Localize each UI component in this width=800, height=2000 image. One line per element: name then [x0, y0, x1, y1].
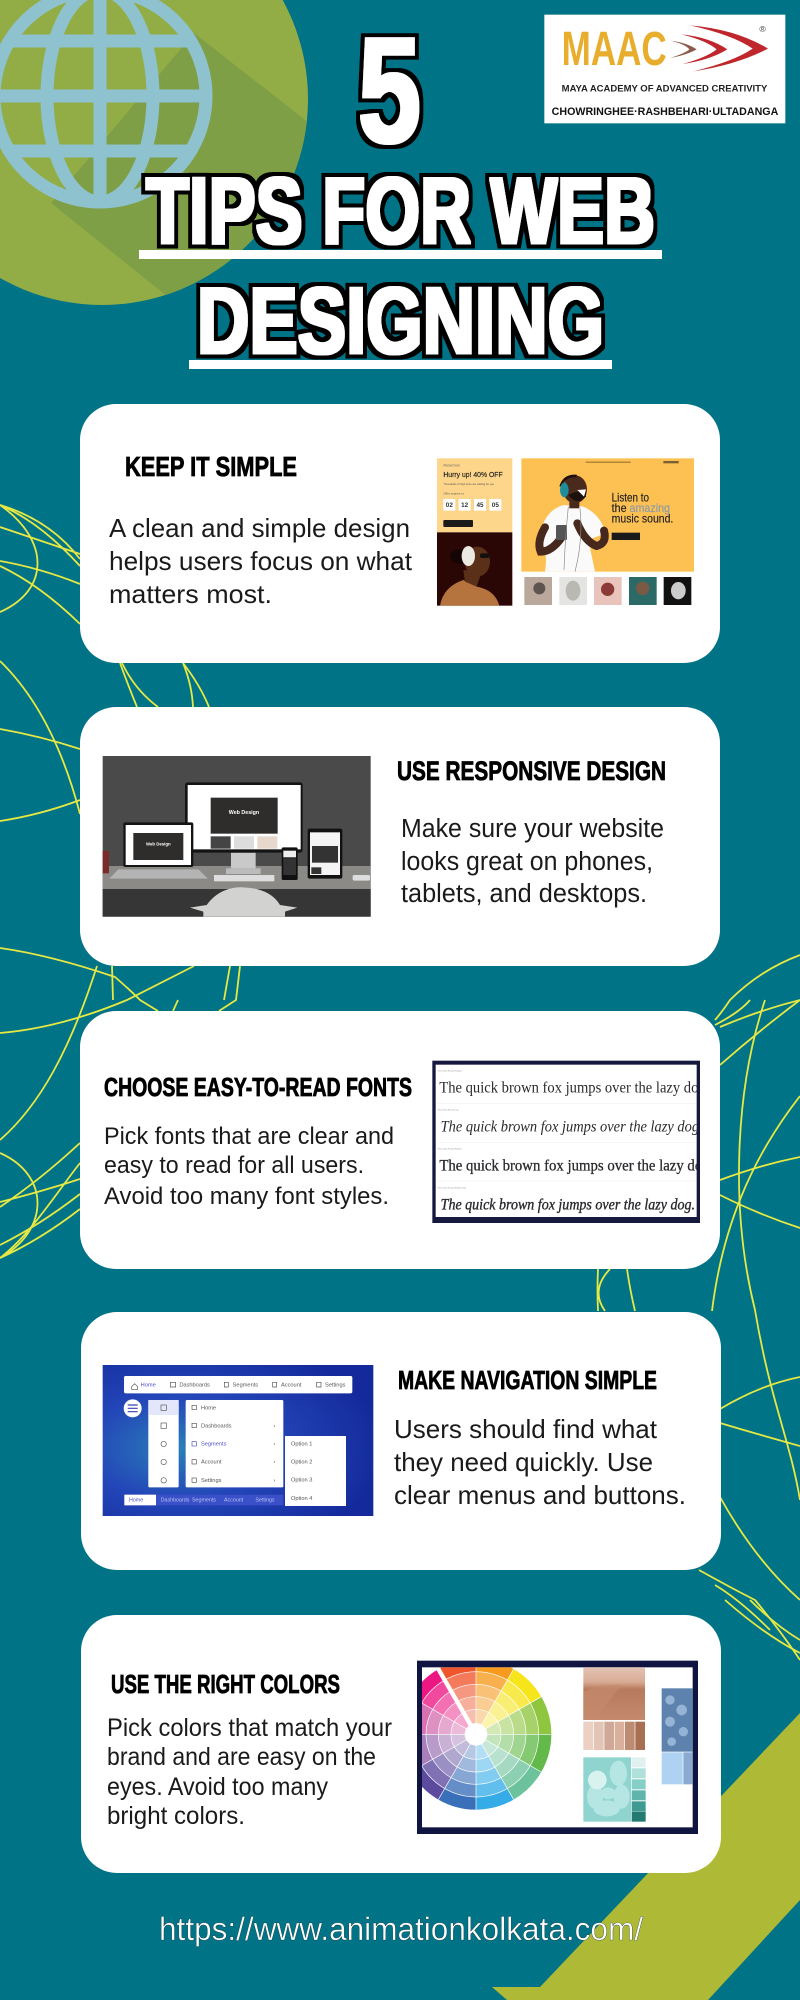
icon: globe [0, 0, 206, 202]
olive arrow shape [492, 1713, 800, 2000]
title [139, 6, 662, 373]
dropdown menu: › [273, 1423, 275, 1429]
hamburger [124, 1399, 142, 1417]
bottom bar [124, 1495, 283, 1505]
body text [107, 1714, 392, 1830]
panel: choose easy-to-read fonts [80, 1011, 720, 1269]
promo card: Hurry up! 40% OFF [443, 470, 503, 479]
submenu: Option 2 [291, 1460, 312, 1466]
desktop monitor: Web Design [229, 810, 259, 816]
promo card [437, 458, 512, 532]
submenu [285, 1436, 346, 1506]
bottom bar: Account [224, 1498, 244, 1504]
image: devices on desk [103, 756, 371, 917]
dropdown menu [186, 1400, 283, 1487]
logo tagline: MAYA ACADEMY OF ADVANCED CREATIVITY [562, 83, 767, 93]
top navigation bar: Account [281, 1383, 302, 1389]
body text: tablets, and desktops. [401, 880, 647, 908]
yellow hero [521, 458, 694, 572]
specimen rows: The quick brown fox jumps over the lazy dog. [439, 1080, 709, 1097]
heading: make navigation simple: MAKE NAVIGATION SIMPLE [398, 1365, 657, 1395]
body text: Users should find what [394, 1414, 658, 1444]
top navigation bar: Home [141, 1383, 156, 1389]
yellow hero: music sound. [612, 512, 673, 525]
dropdown menu: Home [201, 1405, 216, 1411]
promo card: Offer expires in: [443, 492, 465, 496]
top navigation bar: Dashboards [179, 1383, 210, 1389]
tablet [308, 829, 342, 879]
specimen rows: The quick brown fox jumps over the lazy dog. [441, 1119, 703, 1136]
logo wordmark: MAAC [562, 23, 667, 76]
laptop [109, 822, 208, 879]
heading: right colors: USE THE RIGHT COLORS [111, 1669, 340, 1699]
body text: looks great on phones, [401, 848, 653, 876]
laptop: Web Design [146, 842, 171, 847]
panel: make navigation simple [81, 1312, 721, 1570]
logo: MAAC [544, 15, 785, 123]
dropdown menu: Settings [201, 1478, 222, 1484]
logo: MAAC: ® [759, 24, 766, 34]
dropdown menu: › [273, 1442, 275, 1448]
submenu: Option 1 [291, 1442, 312, 1448]
bottom bar: Settings [255, 1498, 275, 1504]
submenu: Option 3 [291, 1478, 312, 1484]
dropdown menu: Dashboards [201, 1423, 232, 1429]
body text: Pick fonts that are clear and [104, 1123, 394, 1150]
dropdown menu: › [273, 1478, 275, 1484]
body text: brand and are easy on the [107, 1743, 376, 1771]
cup [103, 851, 109, 873]
top navigation bar: Segments [233, 1383, 258, 1389]
body text: helps users focus on what [109, 546, 413, 576]
footer url: https://www.animationkolkata.com/ [159, 1911, 643, 1947]
heading: choose fonts: CHOOSE EASY-TO-READ FONTS [104, 1072, 412, 1102]
panel: use the right colors [81, 1615, 721, 1873]
submenu: Option 4 [291, 1496, 312, 1502]
promo card: 12 [461, 502, 469, 509]
body text: matters most. [109, 579, 272, 609]
blue swatch [662, 1688, 693, 1784]
desert swatch [583, 1667, 645, 1750]
promo card: 05 [492, 502, 499, 509]
dark portrait [437, 532, 512, 606]
logo chevrons [670, 25, 768, 71]
body text [104, 1123, 394, 1210]
mouse [353, 875, 370, 881]
body text: eyes. Avoid too many [107, 1773, 328, 1801]
panel: use responsive design [80, 707, 720, 966]
bottom bar: Segments [192, 1498, 216, 1504]
body text: A clean and simple design [109, 513, 410, 543]
body text: Pick colors that match your [107, 1714, 392, 1742]
heading: keep it simple: KEEP IT SIMPLE [125, 451, 297, 482]
specimen rows: The quick brown fox jumps over the lazy dog. [441, 1197, 695, 1214]
flower swatch [583, 1757, 646, 1822]
promo card: 45 [476, 502, 484, 509]
heading: use responsive design: USE RESPONSIVE DESIGN [397, 756, 666, 786]
image: music website mockup [437, 458, 694, 606]
image: font specimen: Times New Roman Medium Italic [437, 1186, 466, 1189]
phone [282, 847, 298, 880]
yellow hero: Listen to [612, 492, 649, 505]
icon sidebar [148, 1400, 179, 1487]
dropdown menu: Account [201, 1460, 222, 1466]
body text: easy to read for all users. [104, 1152, 364, 1179]
specimen rows [439, 1080, 713, 1214]
dropdown menu: Segments [201, 1442, 227, 1448]
body text [394, 1414, 686, 1510]
keyboard [214, 875, 274, 881]
body text: bright colors. [107, 1802, 245, 1830]
globe badge [0, 0, 308, 305]
bottom bar: Dashboards [161, 1498, 190, 1504]
logo branches: CHOWRINGHEE·RASHBEHARI·ULTADANGA [552, 106, 778, 118]
body text: they need quickly. Use [394, 1447, 653, 1477]
promo card: PROMOTION [443, 464, 460, 468]
panel: keep it simple [80, 404, 720, 663]
body text: Avoid too many font styles. [104, 1183, 389, 1210]
product thumbnails [524, 577, 691, 605]
body text: clear menus and buttons. [394, 1480, 686, 1510]
image: navigation menus [103, 1365, 373, 1516]
body text [401, 815, 664, 908]
promo card: Thousands of high price are waiting for you [443, 482, 495, 486]
body text: Make sure your website [401, 815, 664, 843]
title line 2: DESIGNING [197, 268, 604, 373]
yellow hero: the amazing [612, 502, 670, 515]
promo card: 02 [446, 502, 453, 509]
chair [190, 887, 297, 917]
dropdown menu: › [273, 1460, 275, 1466]
image: font specimen: Times New Roman Italic [437, 1108, 459, 1111]
top navigation bar [124, 1376, 352, 1393]
desktop monitor [185, 782, 303, 874]
image: font specimen: Times New Roman Medium [437, 1148, 462, 1150]
colour wheel [422, 1667, 552, 1810]
top navigation bar: Settings [325, 1383, 346, 1389]
body text [109, 513, 413, 609]
decorative yellow curves [0, 505, 800, 1660]
title number 5: 5 [358, 6, 421, 174]
image: font specimen [432, 1061, 713, 1223]
image: colour palette board [401, 1659, 698, 1834]
image: font specimen: Times New Roman Regular [437, 1070, 462, 1073]
bottom bar: Home [129, 1498, 143, 1504]
specimen rows: The quick brown fox jumps over the lazy dog. [439, 1158, 713, 1175]
